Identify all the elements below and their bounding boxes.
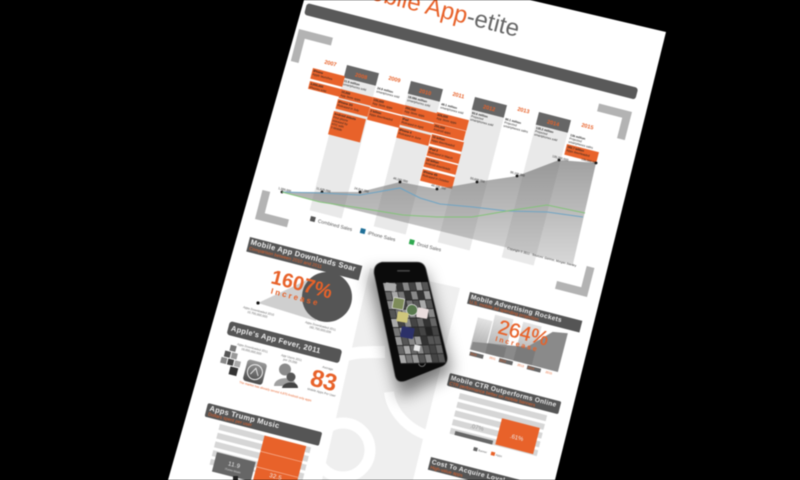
combined sales area chart: 90,100,000 [510,170,526,178]
wedge chart [256,272,352,322]
combined sales area chart: 49,100,000 [431,183,447,191]
year labels and odd year notes: 24.9 million [377,86,394,94]
stat: 1607% increase: Increase [270,287,321,308]
heading bar [467,292,582,332]
orange event boxes: Apps downloaded [566,148,590,158]
orange event boxes: iPhone 4 [399,128,412,135]
combined sales area chart: 135,200,000 [552,154,569,162]
year labels and odd year notes: smartphones sold [376,89,400,99]
bar and area chart: 2011 [489,356,496,361]
small captions: Apps Downloaded 2010 [243,305,275,317]
legend: Droid sales [408,239,442,254]
timeline column: 2012: smartphones sold [470,117,494,127]
speaker [397,270,410,272]
timeline column: 2012: 93.6 million [471,111,488,119]
icon: app store cluster [218,343,267,385]
orange event boxes: Android debuts [334,112,357,121]
orange event boxes: iPhone 3G [338,100,354,107]
orange event boxes: iPad [402,117,409,122]
timeline column: 2012 [438,97,507,250]
orange event boxes: App Store apps [436,116,457,125]
orange event boxes: 100,000 [373,98,385,104]
panel: mobile app downloads soar [242,237,362,335]
timeline column: 2012: Projected [471,114,484,121]
orange event boxes: 250,000 [405,106,417,112]
year labels and odd year notes: 90.1 million [505,117,522,125]
panel: mobile CTR outperforms online [447,373,561,458]
captions: Apps Downloaded 2011 [237,342,269,354]
small captions [242,305,337,335]
year labels and odd year notes: 136 million [570,133,586,141]
timeline column: 2008: 2008 [354,72,368,81]
year labels and odd year notes: 2013 [517,107,530,115]
stat: 83 apps: Average [322,365,334,372]
timeline column: 2008 [310,65,379,218]
orange event boxes: Released in March [428,150,454,160]
legend: iPhone sales [359,228,397,243]
orange event boxes: iPad 2 [429,147,439,153]
panel: apps trump music [205,403,322,480]
year labels and odd year notes: 2007 [324,60,337,68]
orange event boxes: Android downloads [425,161,451,171]
heading bar: Apps Trump Music [209,404,281,430]
orange event boxes: iPhone 4S [423,170,438,177]
stripe chart: iTunes Music [224,467,242,475]
orange event boxes: iPhone [313,69,324,75]
panel: cost to acquire loyal app users [428,457,520,480]
orange event boxes: 2 billion [370,109,382,115]
year labels and odd year notes: 49.1 million [441,102,458,110]
timeline column: 2014: smartphones sold [534,132,558,142]
stripe chart: .07% [469,424,485,433]
orange event boxes: 15 billion [432,135,446,142]
year labels and odd year notes: 2011 [452,92,465,100]
heading bar: Comparison between 2010 and 2011 [249,246,323,269]
combined sales area chart: 46,182,000 [393,176,409,184]
heading bar: Mobile Advertising Rockets [470,294,563,324]
combined sales area chart: 93,600,000 [470,176,486,184]
iPhone sales line [282,188,583,217]
stripe chart: .61% [509,434,524,443]
stat: 264% increase: 264% [496,317,551,351]
stat: 1607% increase: 1607% [269,267,335,303]
bar and area chart: 2013 [517,363,525,368]
year labels and odd year notes: 2009 [388,76,401,84]
heading bar: U.S. mobile ad spending projection [469,299,540,322]
year labels and odd year notes: Projected [504,120,517,127]
copyright note: Copyright © 2011 · Sources: Gartner, Morgan Stanley [507,246,577,268]
orange event boxes: Apps downloaded [369,112,393,122]
orange event boxes: Released in April [401,120,424,130]
timeline column: 2014 [502,112,571,265]
panel: apple's app fever: App Users 2011 [281,353,303,362]
heading bar: Dollars spent per user [208,411,253,428]
orange event boxes: Apple launches [312,72,333,81]
combined sales area chart: 136,000,000 [581,157,598,165]
timeline column: 2010: 2010 [418,88,432,97]
legend: iPhone sales: iPhone Sales [367,230,397,243]
combined sales area chart: 11,625,000 [316,186,331,194]
heading bar: High-value apps [430,465,464,478]
phone body [374,262,447,382]
legend: combined sales: Combined Sales [317,218,353,233]
panel: apple's app fever [218,321,342,403]
combined sales area chart: 24,915,000 [354,186,370,194]
footer marker [233,476,238,480]
legend: Banner [478,448,488,454]
stat: 83 apps: 83 [308,365,340,397]
year labels and odd year notes: smartphones sales [568,140,594,150]
heading bar: Mobile CTR Outperforms Online [450,375,557,409]
timeline column: 2014: 2014 [546,119,561,129]
timeline column: 2010 [374,81,443,234]
heading bar: CTR performance better on mobile banners [449,381,537,408]
corner bracket: top left [291,29,333,70]
bar and area chart: 2015 [545,370,553,376]
year labels and odd year notes: 2015 [581,123,594,131]
stripe chart: 11.9 [227,461,241,470]
legend [473,447,503,458]
stat: 83 apps: Mobile Apps Per User [307,387,336,398]
heading bar: Apple's App Fever, 2011 [230,324,322,355]
stripe chart [208,424,311,480]
orange event boxes: iPhones sold [309,85,327,93]
timeline column: 2008: 11.5 million [343,79,360,87]
timeline column: 2010: 18.086 million [407,95,428,104]
panel: mobile advertising rockets [467,292,582,378]
orange footnote: The market has already served 4,870 Android-only apps [239,380,312,403]
highlighted app icons [384,282,429,351]
screen mosaic of app icons [383,282,446,364]
bar and area chart: 2012 [499,358,507,364]
combined sales area chart: 1,389,000 [278,186,292,193]
panel: apple's app fever: per 25,000 [283,357,298,365]
orange event boxes: Released in June [398,131,422,141]
legend: Droid sales: Droid Sales [416,241,442,254]
orange event boxes: App Store apps [372,101,393,110]
orange event boxes: HTC with [331,122,345,129]
orange event boxes: Released in October [422,173,449,184]
bar and area chart: 2010 [470,352,477,357]
year labels and odd year notes [324,60,596,150]
stat: 264% increase: Increase [495,336,539,354]
corner bracket: bottom right [555,260,594,297]
background watermark swirl [316,268,460,480]
orange event boxes: 10 billion [426,158,440,165]
heading bar [205,403,322,446]
icon: people [274,364,298,388]
paper background [168,0,666,480]
orange event boxes: 3,000,000 [310,82,324,89]
bar and area chart: 2014 [527,365,535,371]
orange event boxes: 425,000 [437,113,449,119]
small captions: 182,700,000,000 [309,325,332,334]
orange event boxes: Apps downloaded [431,138,455,148]
title bar [304,3,638,100]
bar and area chart [468,311,568,378]
year labels and odd year notes: smartphones sold [440,105,464,115]
timeline column: 2010: smartphones sold [407,98,431,108]
heading bar: Mobile App Downloads Soar [250,237,357,273]
phone shadow [368,272,452,398]
orange event boxes: released by [332,119,349,126]
timeline column: 2008: smartphones sold [343,82,367,92]
phone [368,262,452,398]
corner bracket: bottom left [255,190,294,227]
orange event boxes: 250,000 [434,124,446,130]
orange event boxes: T-Mobile [330,125,343,132]
corner bracket: top right [592,104,632,140]
legend: Apps [495,453,503,458]
timeline column: 2014: Projected [535,129,548,136]
orange event boxes: Released in July [337,103,360,113]
home button [419,360,425,366]
orange event boxes: Android apps [433,127,452,136]
timeline column: 2014: 135.2 million [535,126,554,134]
small captions: Apps Downloaded 2011 [305,320,337,332]
year labels and odd year notes: smartphones sales [503,124,529,134]
year labels and odd year notes: Projected [569,136,582,143]
orange event boxes [308,68,599,189]
timeline column: 2012: 2012 [482,104,496,113]
orange event boxes: First phone [333,115,349,123]
orange event boxes: App Store apps [340,93,361,102]
orange event boxes: App Store apps [404,109,425,118]
captions: 18,000,000,000 [241,347,262,356]
combined sales area chart [278,154,598,264]
Droid sales line [282,192,585,217]
orange event boxes: 10,000 [341,90,351,96]
stripe chart [450,393,547,456]
legend: combined sales [309,216,353,233]
orange event boxes: 182.7 billion [567,145,585,153]
small captions: 10,700,000,000 [247,310,268,319]
